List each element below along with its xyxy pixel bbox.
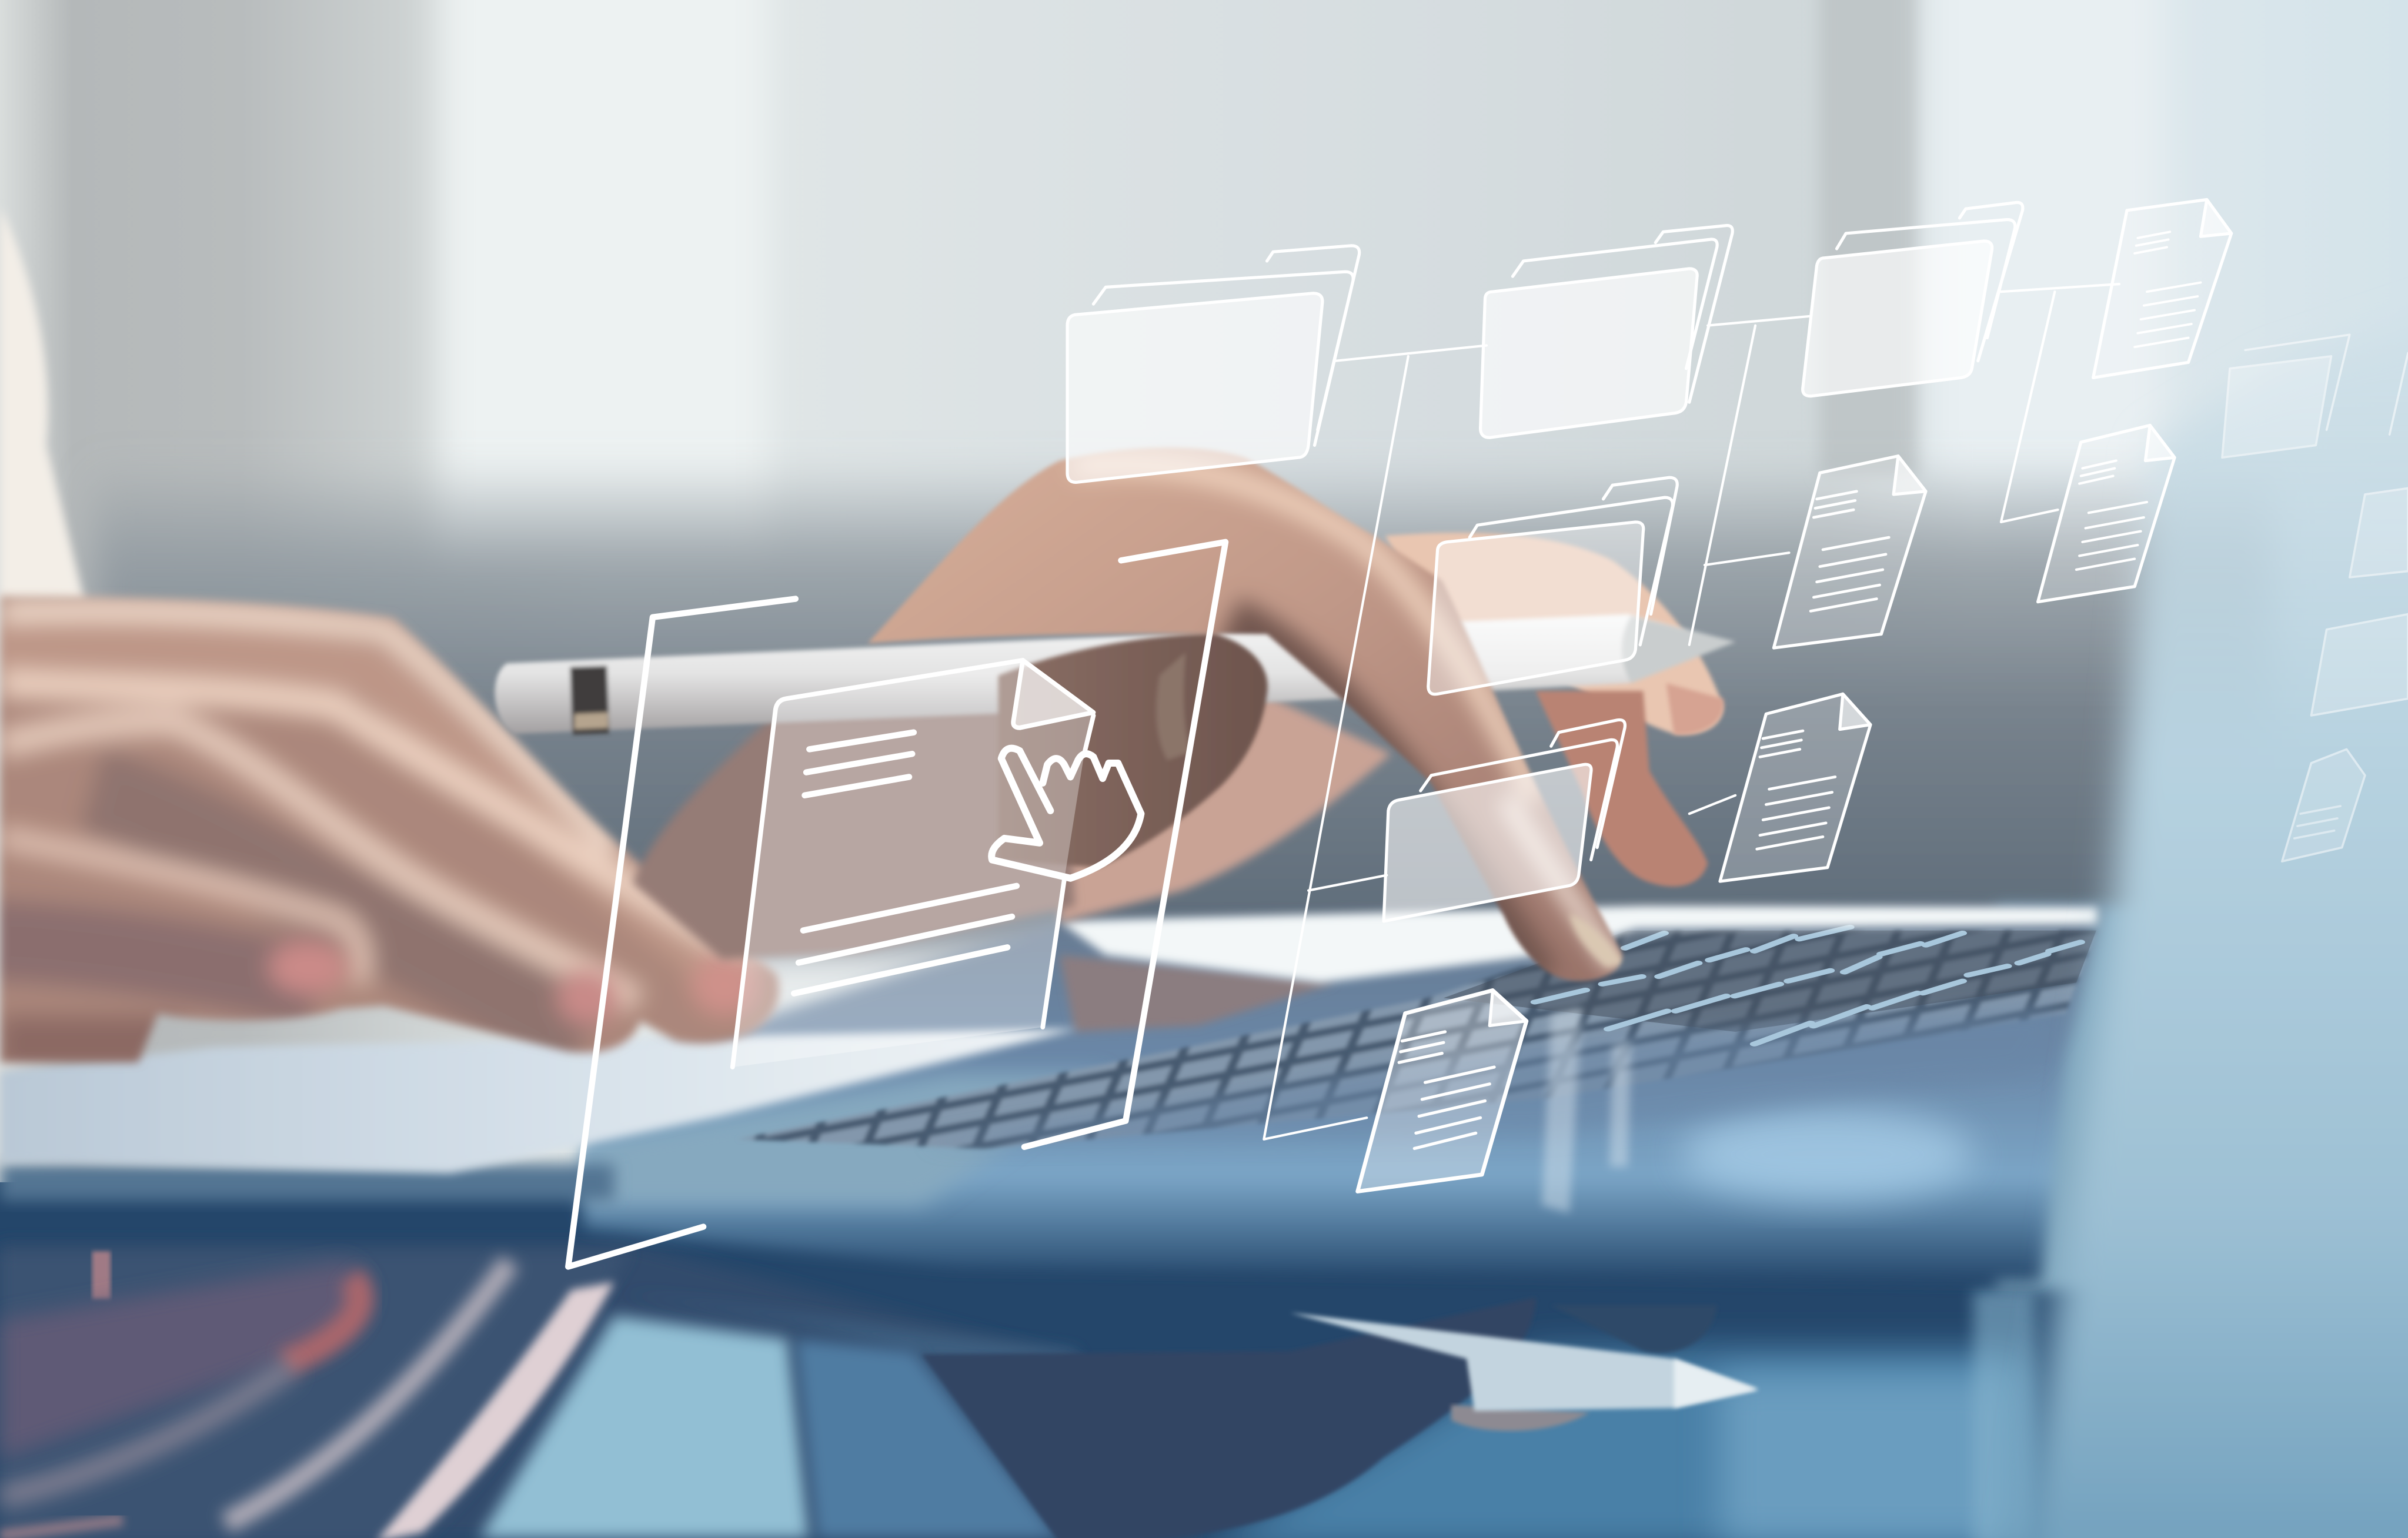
document lower — [1720, 694, 1871, 881]
paper sheet under palm — [0, 1029, 1078, 1173]
folder behind fingers — [1428, 477, 1677, 694]
folder 1 — [1067, 246, 1360, 482]
main document with hand cursor — [733, 660, 1141, 1067]
folder 2 — [1481, 226, 1732, 437]
folder near keyboard — [1384, 720, 1625, 921]
document on keyboard — [1358, 990, 1527, 1192]
keyboard — [737, 927, 2096, 1213]
document right — [2038, 425, 2175, 602]
floating document UI line work — [568, 200, 2408, 1267]
blurred background furniture band — [92, 460, 2273, 952]
left hand — [0, 583, 799, 1075]
document centre — [1774, 456, 1926, 648]
key front highlights in focus — [1535, 927, 2080, 1044]
desk surface with reflection colours — [0, 1182, 2408, 1538]
right hand upper hand, index finger and thumb — [860, 437, 1643, 990]
bright white panel behind keyboard — [1060, 906, 2098, 982]
icon: pointing hand cursor — [991, 748, 1141, 878]
laptop screen blurred foreground — [2012, 307, 2408, 1538]
faded right edge folders and documents — [2222, 335, 2408, 861]
left and right selection brackets — [568, 542, 1225, 1267]
filler behind laptop screen — [1996, 906, 2408, 1290]
stylus pen — [495, 614, 1735, 734]
glare streaks on keyboard — [1542, 1006, 1631, 1213]
hierarchy connector lines — [1264, 284, 2119, 1139]
folder 3 — [1803, 202, 2023, 396]
right hand lower palm and far fingers — [633, 533, 1724, 959]
reflected right hand and pen — [921, 1298, 1758, 1538]
document top right — [2093, 200, 2232, 377]
reflected left hand — [0, 1251, 630, 1538]
palm reflection on laptop deck — [1060, 955, 1336, 1032]
sleeve at left edge — [0, 208, 85, 602]
laptop base — [0, 906, 2104, 1282]
